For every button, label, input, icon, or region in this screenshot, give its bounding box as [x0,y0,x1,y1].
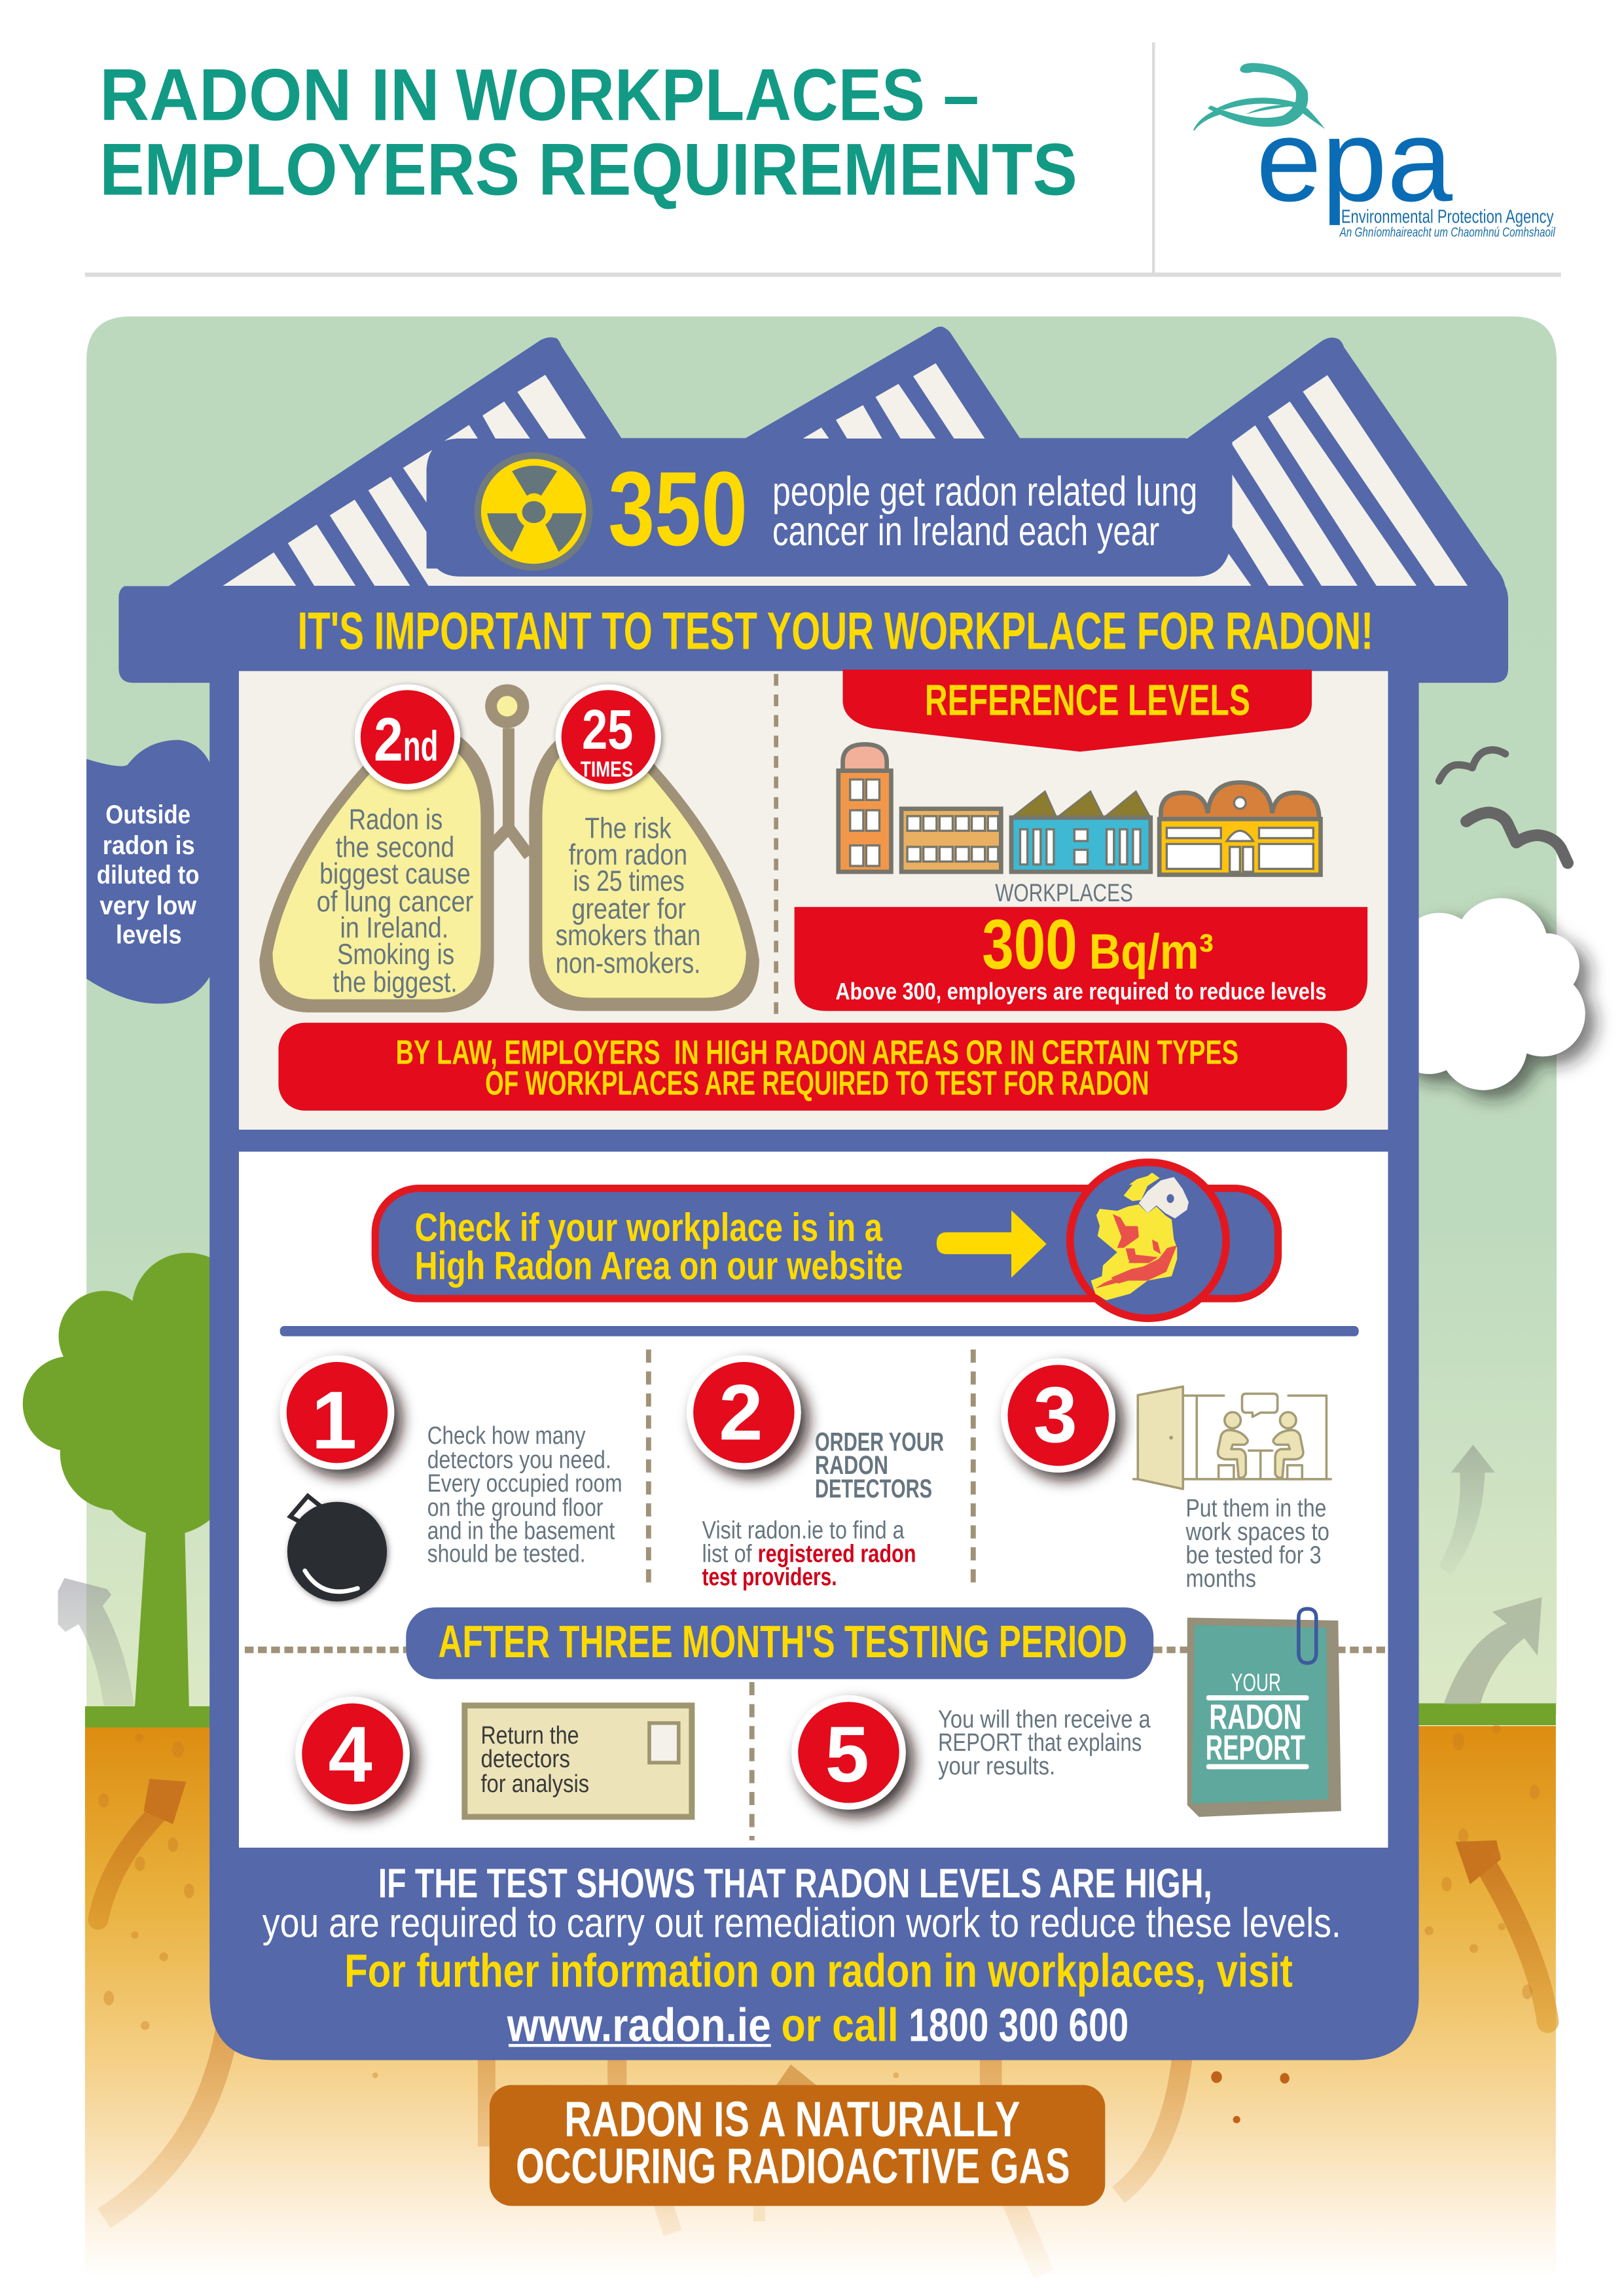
step 1: 1 [312,1374,357,1466]
left lung text: in Ireland. [340,912,448,944]
step 2: RADON [815,1450,888,1480]
remediation text [262,1861,1341,1946]
left lung text: biggest cause [319,857,471,890]
after three months bar [406,1607,1153,1679]
icon: radon report: REPORT [1206,1729,1305,1768]
badge: 2nd: nd [403,722,439,770]
step 3: months [1185,1565,1256,1592]
left lung text [317,803,473,999]
left cloud: radon is [103,831,195,860]
map of Ireland [1070,1162,1226,1318]
icon: envelope: Return the [480,1722,579,1749]
header title: RADON IN [99,54,440,136]
further information: 1800 300 600 [909,1999,1128,2051]
high radon area callout: High Radon Area on our website [415,1243,903,1287]
icon: radiation symbol [474,452,593,571]
left lung text: Radon is [349,803,442,836]
stat badge: 350: people get radon related lung [772,469,1197,514]
300 Bq/m3 box [795,905,1367,1011]
right lung text: smokers than [556,919,700,952]
icon: radon report: YOUR [1231,1669,1281,1696]
left cloud: very low [99,891,197,920]
EPA logo: An Ghníomhaireacht um Chaomhnú Comhshaoil [1339,226,1555,240]
left cloud: Outside [105,800,190,829]
300 Bq/m3 box: 300 [982,905,1077,984]
step 1: detectors you need. [427,1446,611,1474]
after three months bar: AFTER THREE MONTH'S TESTING PERIOD [439,1616,1127,1667]
lungs [259,684,759,1013]
legal requirement bar [278,1023,1347,1111]
EPA logo: epa [1256,95,1453,226]
step 3: be tested for 3 [1185,1542,1322,1570]
right lung text: The risk [585,812,672,845]
panel: facts and reference levels [239,670,1388,1130]
further information: www.radon.ie [507,1999,771,2051]
icon: radon detector [287,1496,387,1602]
right roof stripes [1217,375,1468,586]
step 2 [687,1355,944,1591]
right lung text: non-smokers. [556,946,700,979]
reference levels ribbon [843,670,1312,751]
step 5: 5 [825,1710,869,1799]
high radon area callout: Check if your workplace is in a [415,1205,882,1249]
step 5 [791,1695,1151,1810]
step 2: Visit radon.ie to find a [702,1517,905,1545]
300 Bq/m3 box: Above 300, employers are required to reduce levels [835,978,1326,1005]
step 1: should be tested. [427,1540,586,1568]
naturally occurring gas banner: OCCURING RADIOACTIVE GAS [516,2139,1070,2195]
right lung text: from radon [569,838,687,871]
further information: For further information on radon in workplaces, visit [344,1945,1293,1998]
step 4 [295,1696,692,1817]
step 3 [1001,1358,1331,1592]
step 5: REPORT that explains [938,1729,1142,1757]
soil particles [98,1725,1540,2078]
step 2: 2 [719,1369,763,1456]
naturally occurring gas banner [490,2085,1105,2206]
middle roof stripes [803,363,984,439]
step 2: DETECTORS [815,1474,932,1503]
roof bar heading [118,586,1508,683]
right lung text: greater for [571,893,686,925]
high radon area callout [375,1162,1278,1318]
left lung text: Smoking is [337,938,454,971]
step 2: list of [702,1540,752,1568]
house body [209,645,1419,2060]
step 3: Put them in the [1185,1495,1326,1522]
step 2: test providers. [702,1564,837,1591]
left lung text: the second [336,831,454,864]
300 Bq/m3 box: Bq/m³ [1089,924,1214,980]
step 3: 3 [1034,1371,1077,1459]
right lung text: is 25 times [573,865,685,897]
legal requirement bar: OF WORKPLACES ARE REQUIRED TO TEST FOR RADON [485,1064,1149,1102]
header title: EMPLOYERS REQUIREMENTS [99,129,1077,211]
badge: 25 times: 25 [582,699,633,761]
step 2: ORDER YOUR [815,1427,944,1456]
step 5: your results. [938,1753,1055,1780]
remediation text: IF THE TEST SHOWS THAT RADON LEVELS ARE HIGH, [378,1861,1212,1907]
step 1: Every occupied room [427,1470,623,1498]
icon: envelope: for analysis [480,1770,589,1798]
icon: radon report [1187,1609,1341,1817]
left cloud [86,740,220,1004]
right lung text [556,812,700,979]
header title [99,54,1077,211]
house roof [169,327,1506,589]
step 1: Check how many [427,1422,586,1450]
step 4: 4 [329,1710,372,1799]
tree [23,1253,264,1707]
icon: radon report: RADON [1209,1698,1301,1737]
reference levels ribbon: REFERENCE LEVELS [925,675,1250,725]
remediation text: you are required to carry out remediation work to reduce these levels. [262,1901,1341,1946]
birds [1439,750,1568,863]
left cloud: levels [116,920,182,950]
arrows rising through sky [58,1444,1542,1706]
right cloud [1388,898,1585,1090]
arrow [937,1210,1047,1278]
workplace buildings [839,744,1320,874]
naturally occurring gas banner: RADON IS A NATURALLY [564,2092,1020,2147]
further information: or call [781,1999,899,2051]
left lung text: of lung cancer [317,885,473,918]
arrows rising through soil [98,1779,1548,2274]
EPA logo [1193,63,1555,240]
left roof stripes [223,375,1228,586]
stat badge: 350: 350 [608,450,748,568]
step 3: work spaces to [1185,1518,1329,1546]
step 1: and in the basement [427,1518,615,1545]
icon: envelope: detectors [480,1746,570,1773]
further information [344,1945,1293,2051]
step 2: registered radon [758,1540,916,1568]
badge: 2nd [355,684,460,790]
badge: 2nd: 2 [374,705,403,774]
stat badge: 350: cancer in Ireland each year [772,509,1159,554]
step 1 [280,1355,623,1602]
left cloud: diluted to [97,860,200,889]
badge: 25 times: TIMES [581,757,633,781]
left lung text: the biggest. [333,966,458,999]
header title: WORKPLACES – [456,54,979,136]
workplaces label: WORKPLACES [995,880,1133,907]
panel: steps [239,1152,1388,1848]
landscape background [85,317,1557,2278]
EPA logo: Environmental Protection Agency [1341,206,1554,227]
stat badge: 350 [427,439,1232,577]
legal requirement bar: BY LAW, EMPLOYERS IN HIGH RADON AREAS OR IN CERTAIN TYPES [396,1033,1238,1071]
icon: office room with door [1134,1386,1331,1489]
step 5: You will then receive a [938,1706,1151,1733]
badge: 25 times [556,684,661,790]
step 1: on the ground floor [427,1494,604,1522]
icon: envelope [465,1706,692,1817]
